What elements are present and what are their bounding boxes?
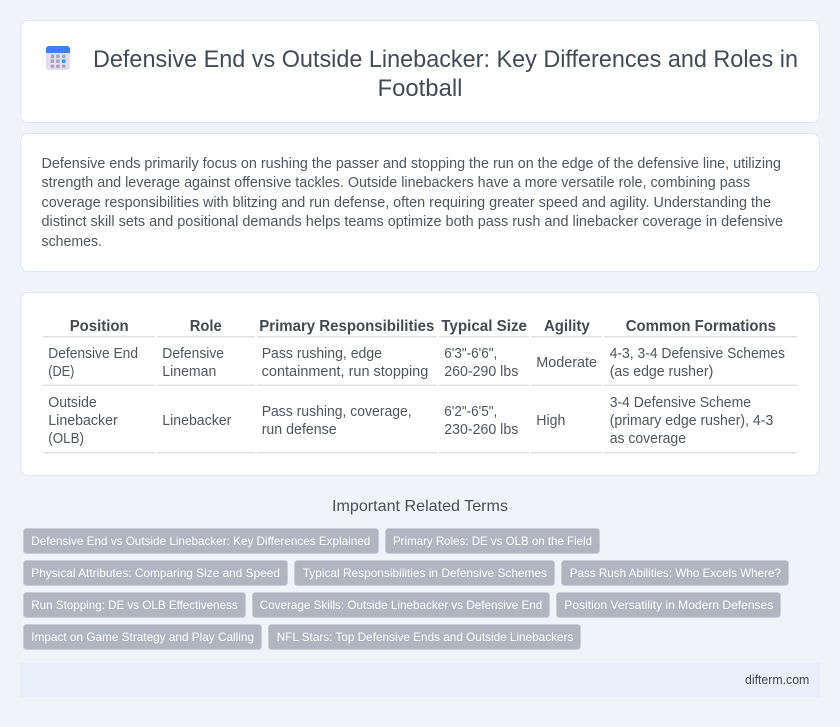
table row: defensive end: Pass rushing, edge xyxy=(262,346,382,362)
table row: outside linebacker: (OLB) xyxy=(48,431,84,447)
tag xyxy=(24,624,262,650)
heading: important related terms: Important Related Terms xyxy=(332,498,508,515)
tag: Primary Roles: DE vs OLB on the Field xyxy=(393,534,592,548)
table row: defensive end: 260-290 lbs xyxy=(444,364,518,380)
table row: outside linebacker xyxy=(43,395,797,454)
table row: outside linebacker: 3-4 Defensive Scheme xyxy=(610,395,751,411)
table row: defensive end: containment, run stopping xyxy=(262,364,428,380)
intro paragraph: schemes. xyxy=(42,234,102,250)
tag xyxy=(268,624,580,650)
footer brand: difterm.com xyxy=(745,672,809,687)
intro paragraph: strength and leverage against offensive tackles. Outside linebackers have a more versatile role, combining pass xyxy=(42,175,750,191)
panel: header xyxy=(20,20,820,122)
tag xyxy=(252,592,550,618)
panel: comparison table xyxy=(20,292,820,476)
tag xyxy=(562,560,788,586)
intro paragraph xyxy=(42,156,783,250)
tag xyxy=(24,592,246,618)
panel: introduction xyxy=(20,134,820,272)
table row: defensive end: 4-3, 3-4 Defensive Schemes xyxy=(610,346,785,362)
table header row: Typical Size xyxy=(441,318,527,335)
tag xyxy=(294,560,554,586)
table header row: Common Formations xyxy=(626,318,776,335)
table row: defensive end: (as edge rusher) xyxy=(610,364,713,380)
table row: defensive end: Defensive End xyxy=(48,346,138,362)
table row: outside linebacker: run defense xyxy=(262,422,337,438)
table row: defensive end: Defensive xyxy=(162,346,224,362)
table row: outside linebacker: (primary edge rusher), 4-3 xyxy=(610,413,773,429)
title xyxy=(93,46,798,102)
table header row xyxy=(43,318,797,338)
tag: Run Stopping: DE vs OLB Effectiveness xyxy=(31,598,238,612)
table row: outside linebacker: High xyxy=(536,413,565,429)
table row: defensive end: Lineman xyxy=(162,364,216,380)
table row: outside linebacker: 230-260 lbs xyxy=(444,422,518,438)
table row: outside linebacker: as coverage xyxy=(610,431,686,447)
tag: Defensive End vs Outside Linebacker: Key Differences Explained xyxy=(31,534,370,548)
title: Football xyxy=(378,75,462,102)
tag: Pass Rush Abilities: Who Excels Where? xyxy=(570,566,781,580)
tag: Impact on Game Strategy and Play Calling xyxy=(31,630,254,644)
intro paragraph: Defensive ends primarily focus on rushing the passer and stopping the run on the edge of the defensive line, utilizing xyxy=(42,156,781,172)
related term tags xyxy=(24,528,788,650)
tag xyxy=(556,592,780,618)
table row: defensive end: Moderate xyxy=(536,355,597,371)
tag xyxy=(386,528,600,554)
table row: defensive end: 6'3"-6'6", xyxy=(444,346,497,362)
table row: outside linebacker: Outside xyxy=(48,395,97,411)
table row: defensive end xyxy=(43,346,797,386)
table header row: Position xyxy=(70,318,129,335)
table row: outside linebacker: 6'2"-6'5", xyxy=(444,404,497,420)
footer xyxy=(20,663,820,697)
tag xyxy=(24,528,378,554)
intro paragraph: coverage responsibilities with blitzing and run defense, often requiring greater speed and agility. Understanding the xyxy=(42,195,771,211)
table row: outside linebacker: Linebacker xyxy=(162,413,231,429)
table row: outside linebacker: Pass rushing, coverage, xyxy=(262,404,412,420)
table header row: Role xyxy=(190,318,222,335)
intro paragraph: distinct skill sets and positional demands helps teams optimize both pass rush and linebacker coverage in defensive xyxy=(42,214,783,230)
icon: calendar xyxy=(46,46,70,70)
table row: outside linebacker: Linebacker xyxy=(48,413,118,429)
table row: defensive end: (DE) xyxy=(48,364,74,380)
tag: Physical Attributes: Comparing Size and Speed xyxy=(31,566,280,580)
title: Defensive End vs Outside Linebacker: Key Differences and Roles in xyxy=(93,46,798,73)
tag: NFL Stars: Top Defensive Ends and Outside Linebackers xyxy=(277,630,573,644)
table header row: Primary Responsibilities xyxy=(259,318,434,335)
tag xyxy=(24,560,288,586)
tag: Position Versatility in Modern Defenses xyxy=(564,598,773,612)
tag: Typical Responsibilities in Defensive Schemes xyxy=(303,566,547,580)
tag: Coverage Skills: Outside Linebacker vs Defensive End xyxy=(260,598,542,612)
table header row: Agility xyxy=(544,318,590,335)
